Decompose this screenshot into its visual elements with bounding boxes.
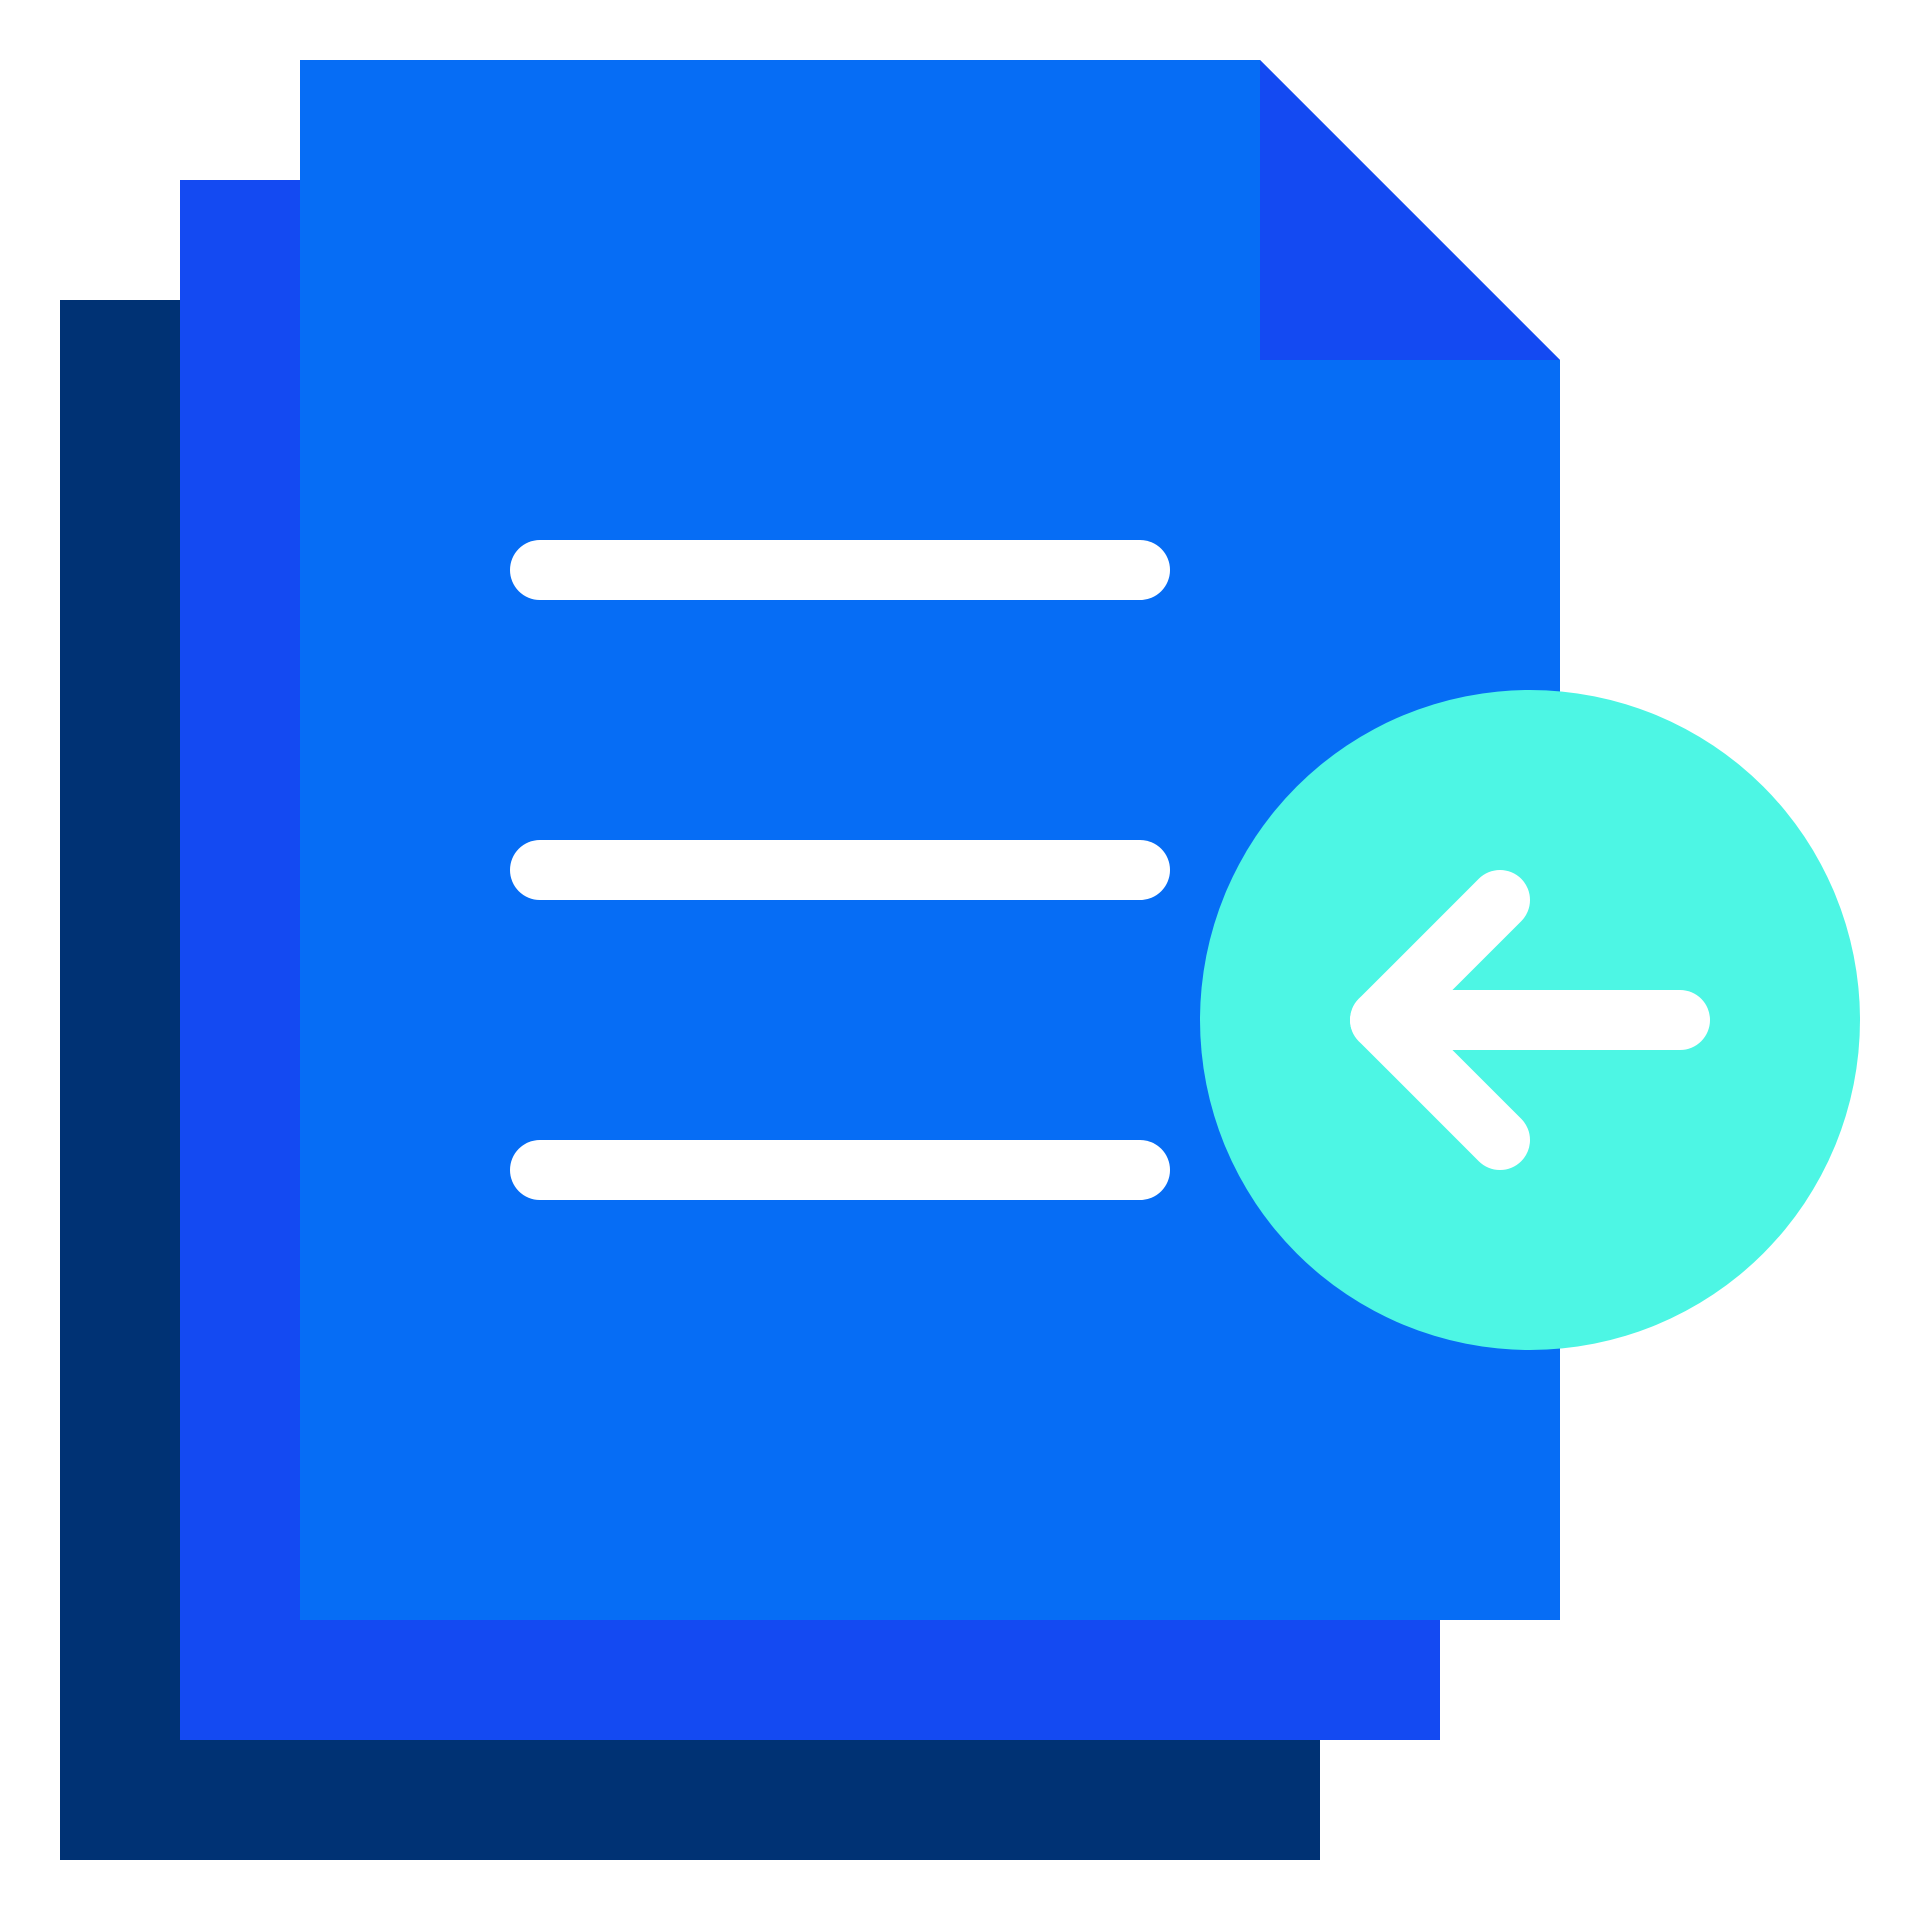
text lines on front page: [510, 540, 1170, 1200]
back page: [60, 300, 1320, 1860]
middle page: [180, 180, 1440, 1740]
icon: left arrow: [1380, 900, 1680, 1140]
teal circle badge: [1200, 690, 1860, 1350]
front page: [300, 60, 1560, 1620]
page corner fold: [1260, 60, 1560, 360]
